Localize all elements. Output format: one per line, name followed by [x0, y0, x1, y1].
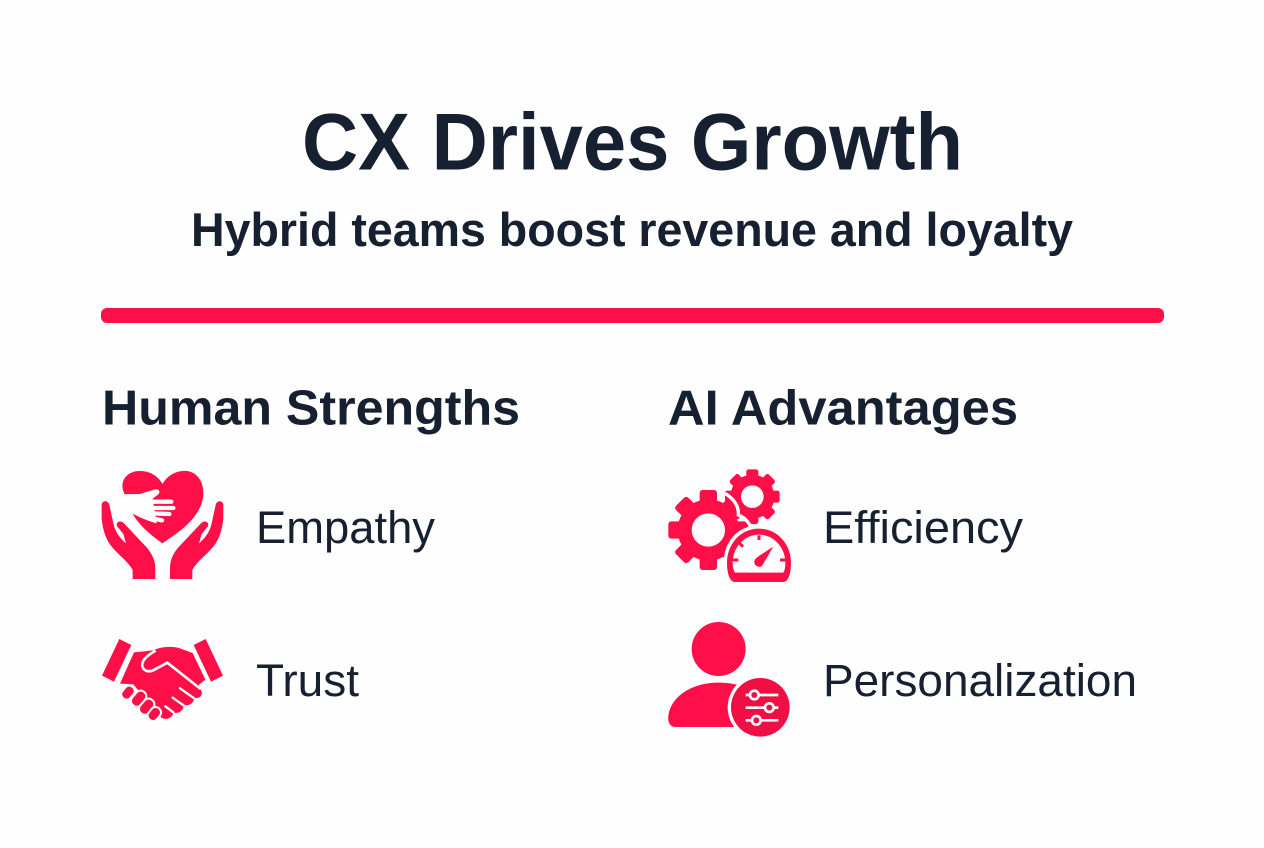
heading: AI Advantages: AI Advantages — [668, 382, 1018, 436]
red divider bar — [101, 308, 1164, 323]
heading: Human Strengths: Human Strengths — [102, 382, 520, 436]
large gear — [668, 490, 748, 570]
icon: person with settings sliders — [668, 622, 793, 740]
label: Trust: Trust — [256, 655, 359, 706]
label: Efficiency: Efficiency — [823, 502, 1024, 553]
label: Empathy: Empathy — [256, 502, 435, 553]
icon: heart held by hands — [102, 471, 223, 579]
small gear — [725, 469, 780, 524]
subtitle: Hybrid teams boost revenue and loyalty — [191, 203, 1073, 256]
speedometer — [724, 525, 794, 585]
title: CX Drives Growth — [302, 98, 963, 188]
icon: handshake — [102, 639, 223, 723]
label: Personalization: Personalization — [823, 655, 1137, 706]
icon: gears and speedometer — [668, 469, 794, 585]
